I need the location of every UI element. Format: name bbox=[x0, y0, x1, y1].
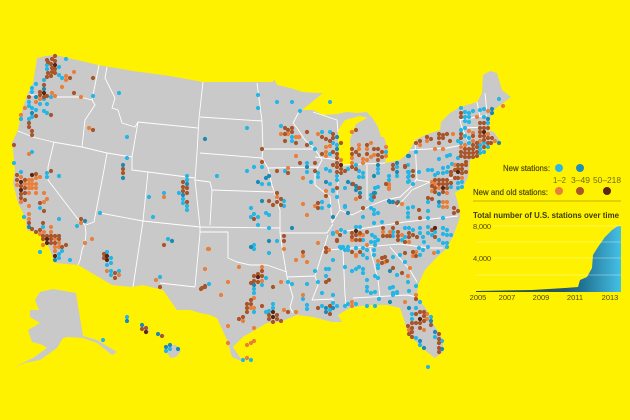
x axis labels: 2009 bbox=[533, 293, 549, 302]
y axis labels bbox=[473, 222, 491, 263]
x axis labels: 2013 bbox=[602, 293, 618, 302]
legend size labels: 1–2 bbox=[553, 176, 566, 185]
legend size labels bbox=[553, 176, 621, 185]
legend row: new and old stations: New and old stations: bbox=[473, 187, 548, 197]
legend bbox=[473, 163, 621, 197]
chart area bbox=[476, 226, 621, 292]
x axis labels: 2007 bbox=[499, 293, 515, 302]
legend size labels: 50–218 bbox=[593, 176, 621, 185]
x axis labels bbox=[470, 293, 618, 302]
station dots: new stations, 1–2 bbox=[14, 59, 499, 367]
station dots: new stations, 3–49 bbox=[29, 89, 499, 349]
y axis labels: 8,000 bbox=[473, 222, 491, 231]
land: contiguous United States bbox=[12, 55, 511, 362]
land: Hawaii bbox=[125, 316, 181, 358]
map of U.S. stations bbox=[12, 55, 511, 368]
area chart: stations over time bbox=[470, 222, 621, 302]
y axis labels: 4,000 bbox=[473, 254, 491, 263]
legend size labels: 3–49 bbox=[571, 176, 590, 185]
legend row: new stations: New stations: bbox=[503, 163, 550, 173]
station dots: new and old stations, 50–218 bbox=[21, 65, 484, 332]
chart title: Total number of U.S. stations over time bbox=[473, 210, 619, 220]
x axis labels: 2011 bbox=[567, 293, 583, 302]
state borders bbox=[18, 65, 488, 313]
station dots: new and old stations, 3–49 bbox=[14, 56, 492, 352]
land: Alaska bbox=[13, 289, 117, 368]
station dots: new and old stations, 1–2 bbox=[17, 72, 503, 358]
legend row: new stations bbox=[503, 163, 584, 173]
x axis labels: 2005 bbox=[470, 293, 486, 302]
legend row: new and old stations bbox=[473, 187, 611, 197]
